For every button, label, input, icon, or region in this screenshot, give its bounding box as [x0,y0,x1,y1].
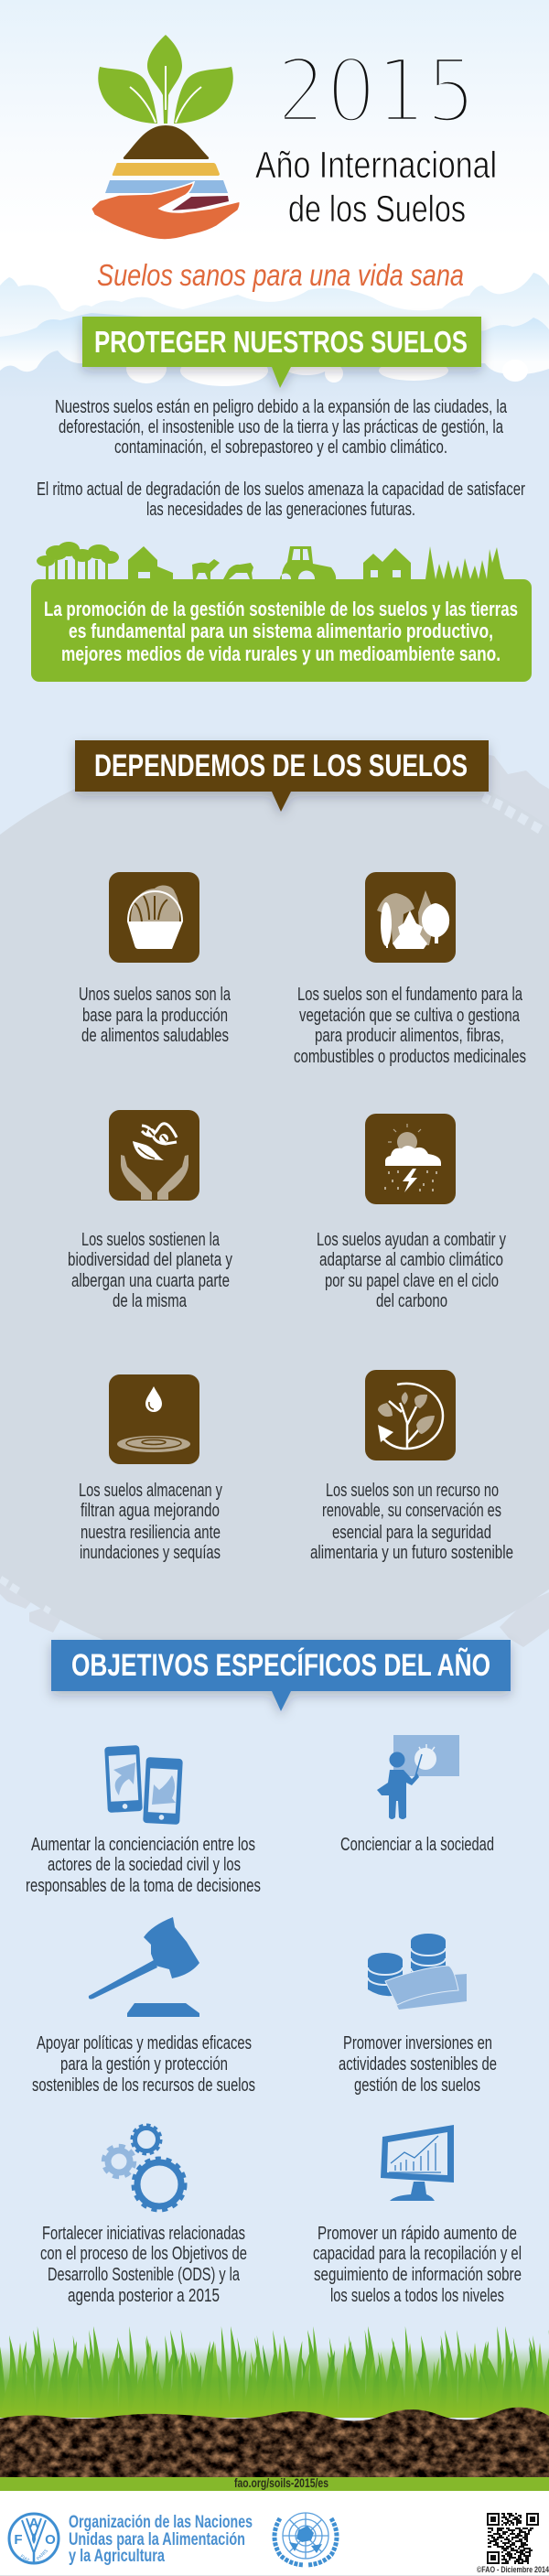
footer [0,2491,549,2576]
tagline: Suelos sanos para una vida sana [97,258,464,292]
text: initiatives: Desarrollo Sostenible (ODS) y la [48,2265,241,2285]
item: water [79,1374,222,1563]
text: investment: Promover inversiones en [343,2033,492,2053]
silhouette: barn [128,546,173,579]
text: investment: gestión de los suelos [354,2075,480,2096]
silhouette: forest [425,546,504,579]
text: food: de alimentos saludables [81,1026,229,1046]
icon: phones [104,1745,183,1825]
text: awareness [26,1835,261,1896]
title: Año Internacional de los Suelos: Año Internacional [255,144,497,186]
FAO logo: O [45,2532,56,2548]
heading banner: Proteger nuestros suelos [82,317,481,388]
icon: trees [365,872,456,963]
grass [0,2324,549,2418]
text: awareness: responsables de la toma de decisiones [26,1876,261,1896]
organisation name [69,2513,253,2566]
FAO logo: F [14,2532,23,2548]
organisation name: Organización de las Naciones [69,2513,253,2532]
intro paragraphs: las necesidades de las generaciones futuras. [146,500,415,520]
text: initiatives [40,2224,247,2306]
background earth circle [0,741,549,1675]
organisation name: y la Agricultura [69,2547,165,2566]
text: investment [339,2033,497,2096]
silhouette: trees [37,542,119,579]
green message box [31,579,532,682]
text: water [79,1481,222,1563]
item: climate [317,1114,506,1311]
objective: information [313,2125,522,2306]
item: vegetation [294,872,526,1067]
organisation name: Unidas para la Alimentación [69,2530,245,2549]
text: biodiversity: biodiversidad del planeta y [68,1250,232,1270]
icon: gavel [89,1917,199,2017]
text: policies: sostenibles de los recursos de suelos [32,2075,255,2096]
icon: teacher at board [377,1735,459,1819]
icon: plant cycle [365,1370,456,1460]
FAO logo: PANIS [36,2548,49,2561]
text: policies: para la gestión y protección [60,2054,228,2075]
title: Año Internacional de los Suelos: de los Suelos [288,188,466,230]
text: policies: Apoyar políticas y medidas eficaces [37,2033,252,2053]
website strip [0,2475,549,2491]
FAO logo: A [29,2516,39,2531]
text: biodiversity: Los suelos sostienen la [81,1230,221,1250]
objective: policies [32,1917,255,2096]
text: investment: actividades sostenibles de [339,2054,497,2075]
icon: basket [109,872,199,963]
intro paragraphs [37,397,525,520]
title: Año Internacional de los Suelos [255,144,497,230]
objective: awareness [26,1745,261,1896]
logo leaves [98,35,233,124]
icon: coins and notes [368,1934,467,2010]
intro paragraphs: contaminación, el sobrepastoreo y el cambio climático. [114,437,447,458]
text: water: filtran agua mejorando [81,1501,220,1521]
rural silhouette [37,542,504,587]
heading banner: Dependemos de los suelos [75,740,489,812]
text: food: Unos suelos sanos son la [79,985,231,1005]
icon: DNA, leaf and hands [109,1110,199,1201]
text: water: Los suelos almacenan y [79,1481,222,1501]
text: climate [317,1230,506,1311]
FAO logo: FIAT [19,2554,30,2564]
text: initiatives: con el proceso de los Objetivos de [40,2244,247,2264]
item: biodiversity [68,1110,232,1311]
icon: water drop [109,1374,199,1464]
logo: International Year of Soils [92,35,240,240]
icon: gears [103,2125,185,2210]
text: biodiversity [68,1230,232,1311]
heading banner: Objetivos específicos del año [51,1640,511,1711]
item: conservation [310,1370,513,1563]
logo soil layers [105,125,229,210]
item: food [79,872,231,1046]
text: initiatives: agenda posterior a 2015 [68,2286,220,2306]
text: vegetation [294,985,526,1067]
objective: investment [339,1934,497,2096]
text: conservation [310,1481,513,1563]
FAO logo [9,2514,59,2564]
text: biodiversity: de la misma [113,1291,188,1311]
objective: initiatives [40,2125,247,2306]
icon: storm cloud [365,1114,456,1204]
title year: 2015 [276,39,476,143]
website strip: fao.org/soils-2015/es [234,2475,328,2490]
UN logo [274,2513,337,2565]
text: awareness: actores de la sociedad civil y los [48,1855,241,1875]
text: awareness: Aumentar la concienciación entre los [31,1835,255,1855]
QR code [488,2514,538,2563]
soil [0,2407,549,2480]
icon: monitor with chart [381,2125,454,2201]
text: water: inundaciones y sequías [80,1543,221,1563]
text: climate: del carbono [376,1291,447,1311]
silhouette: cow [223,563,253,579]
text: biodiversity: albergan una cuarta parte [71,1271,230,1291]
silhouette: tractor [280,546,336,587]
silhouette: houses [363,548,411,579]
objective: society [340,1735,494,1855]
text: information [313,2224,522,2306]
text: food [79,985,231,1046]
text: society: Concienciar a la sociedad [340,1835,494,1855]
silhouette: sheep [192,559,220,579]
text: food: base para la producción [82,1006,228,1026]
logo hand [92,182,240,240]
text: water: nuestra resiliencia ante [81,1523,221,1543]
text: policies [32,2033,255,2096]
text: conservation: esencial para la seguridad [332,1523,491,1543]
text: initiatives: Fortalecer iniciativas relacionadas [42,2224,245,2244]
